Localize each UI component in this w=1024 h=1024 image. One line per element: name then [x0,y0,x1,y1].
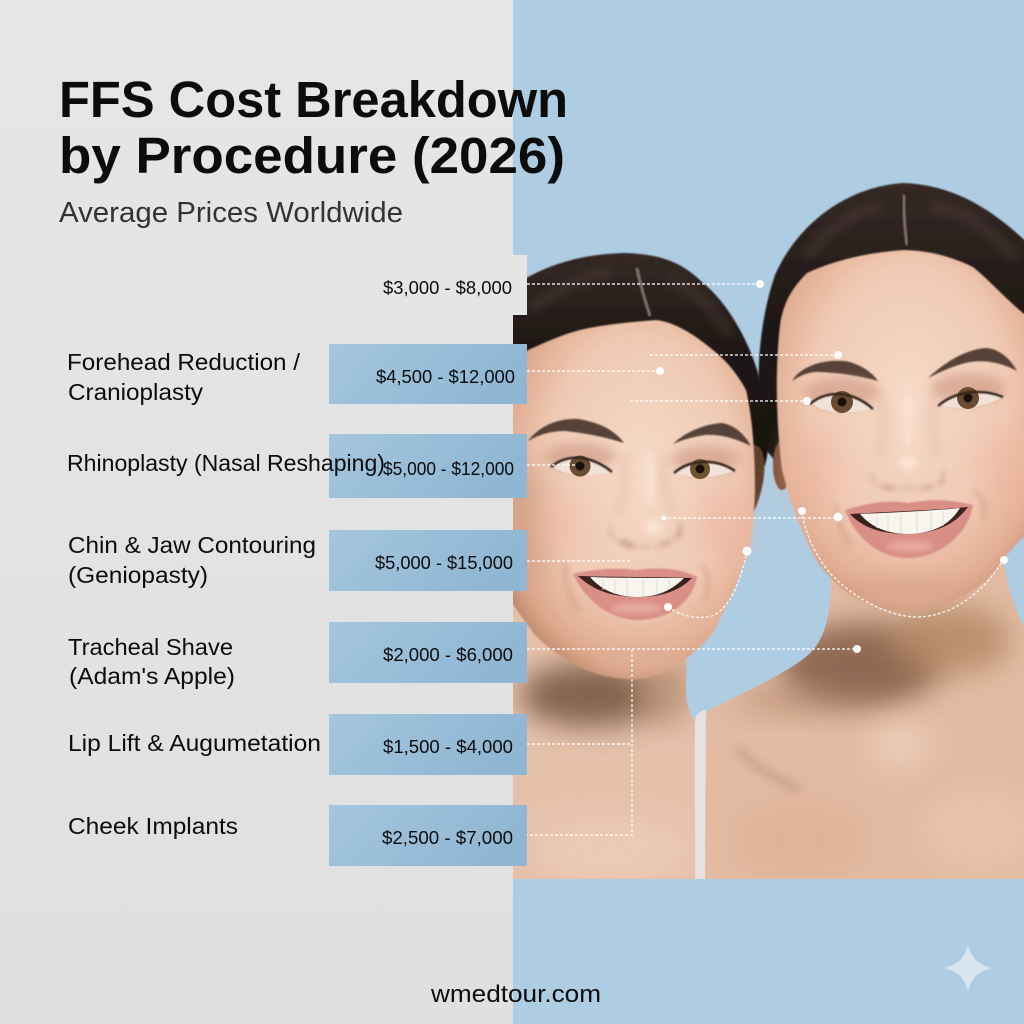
price labels: $5,000 - $12,000 [383,458,514,479]
right woman smile creases [835,490,984,545]
procedure labels: (Adam's Apple) [69,663,235,689]
right woman face [777,250,1024,611]
procedure labels: Rhinoplasty (Nasal Reshaping) [67,450,385,476]
right woman nose [871,390,945,489]
procedure labels: Chin & Jaw Contouring [68,532,316,558]
right woman [700,183,1024,890]
left woman nose [609,452,682,548]
left woman hair [500,253,768,470]
price labels: $3,000 - $8,000 [383,277,512,298]
bar: rhinoplasty [329,434,527,498]
left woman ear [753,444,766,512]
white top strap [695,710,706,879]
footer website: wmedtour.com [430,981,601,1008]
title: by Procedure (2026) [59,127,565,184]
title [59,71,568,184]
bar: tracheal [329,622,527,683]
left woman neck and chest [513,604,695,879]
panel: left grey background [0,0,513,1024]
procedure labels: Tracheal Shave [68,634,233,660]
left woman eyes [544,443,739,479]
bar: chin [329,530,527,591]
right woman eyes [804,373,1006,413]
price labels [375,277,515,848]
right woman hair [759,183,1024,490]
price labels: $2,000 - $6,000 [383,644,513,665]
procedure labels: Forehead Reduction / [67,349,300,375]
portrait photo illustration [500,183,1024,890]
left woman mouth [573,568,697,620]
right woman mouth [845,500,973,558]
bar: lip [329,714,527,775]
bar: cheek [329,805,527,866]
right woman neck and chest [700,560,1024,890]
bar: forehead [329,344,527,404]
procedure labels: Cranioplasty [68,379,203,405]
price labels: $5,000 - $15,000 [375,552,513,573]
left woman smile creases [566,565,708,612]
left woman [500,253,768,890]
marker dots [656,280,1008,653]
right woman ear [772,440,787,491]
price box: Hairline top white [329,255,527,315]
right woman brows [792,361,878,381]
price labels: $2,500 - $7,000 [382,827,513,848]
panel: right blue background [513,0,1024,1024]
price bars [329,344,527,866]
procedure labels: (Geniopasty) [68,562,208,588]
procedure labels: Cheek Implants [68,813,238,839]
price labels: $1,500 - $4,000 [383,736,513,757]
icon: sparkle [944,944,992,992]
price labels: $4,500 - $12,000 [376,366,515,387]
subtitle: Average Prices Worldwide [59,197,403,229]
left woman brows [528,419,624,443]
left woman face [500,320,755,679]
dotted leader lines [527,284,1003,835]
procedure labels [67,349,385,839]
title: FFS Cost Breakdown [59,71,568,128]
procedure labels: Lip Lift & Augumetation [68,730,321,756]
